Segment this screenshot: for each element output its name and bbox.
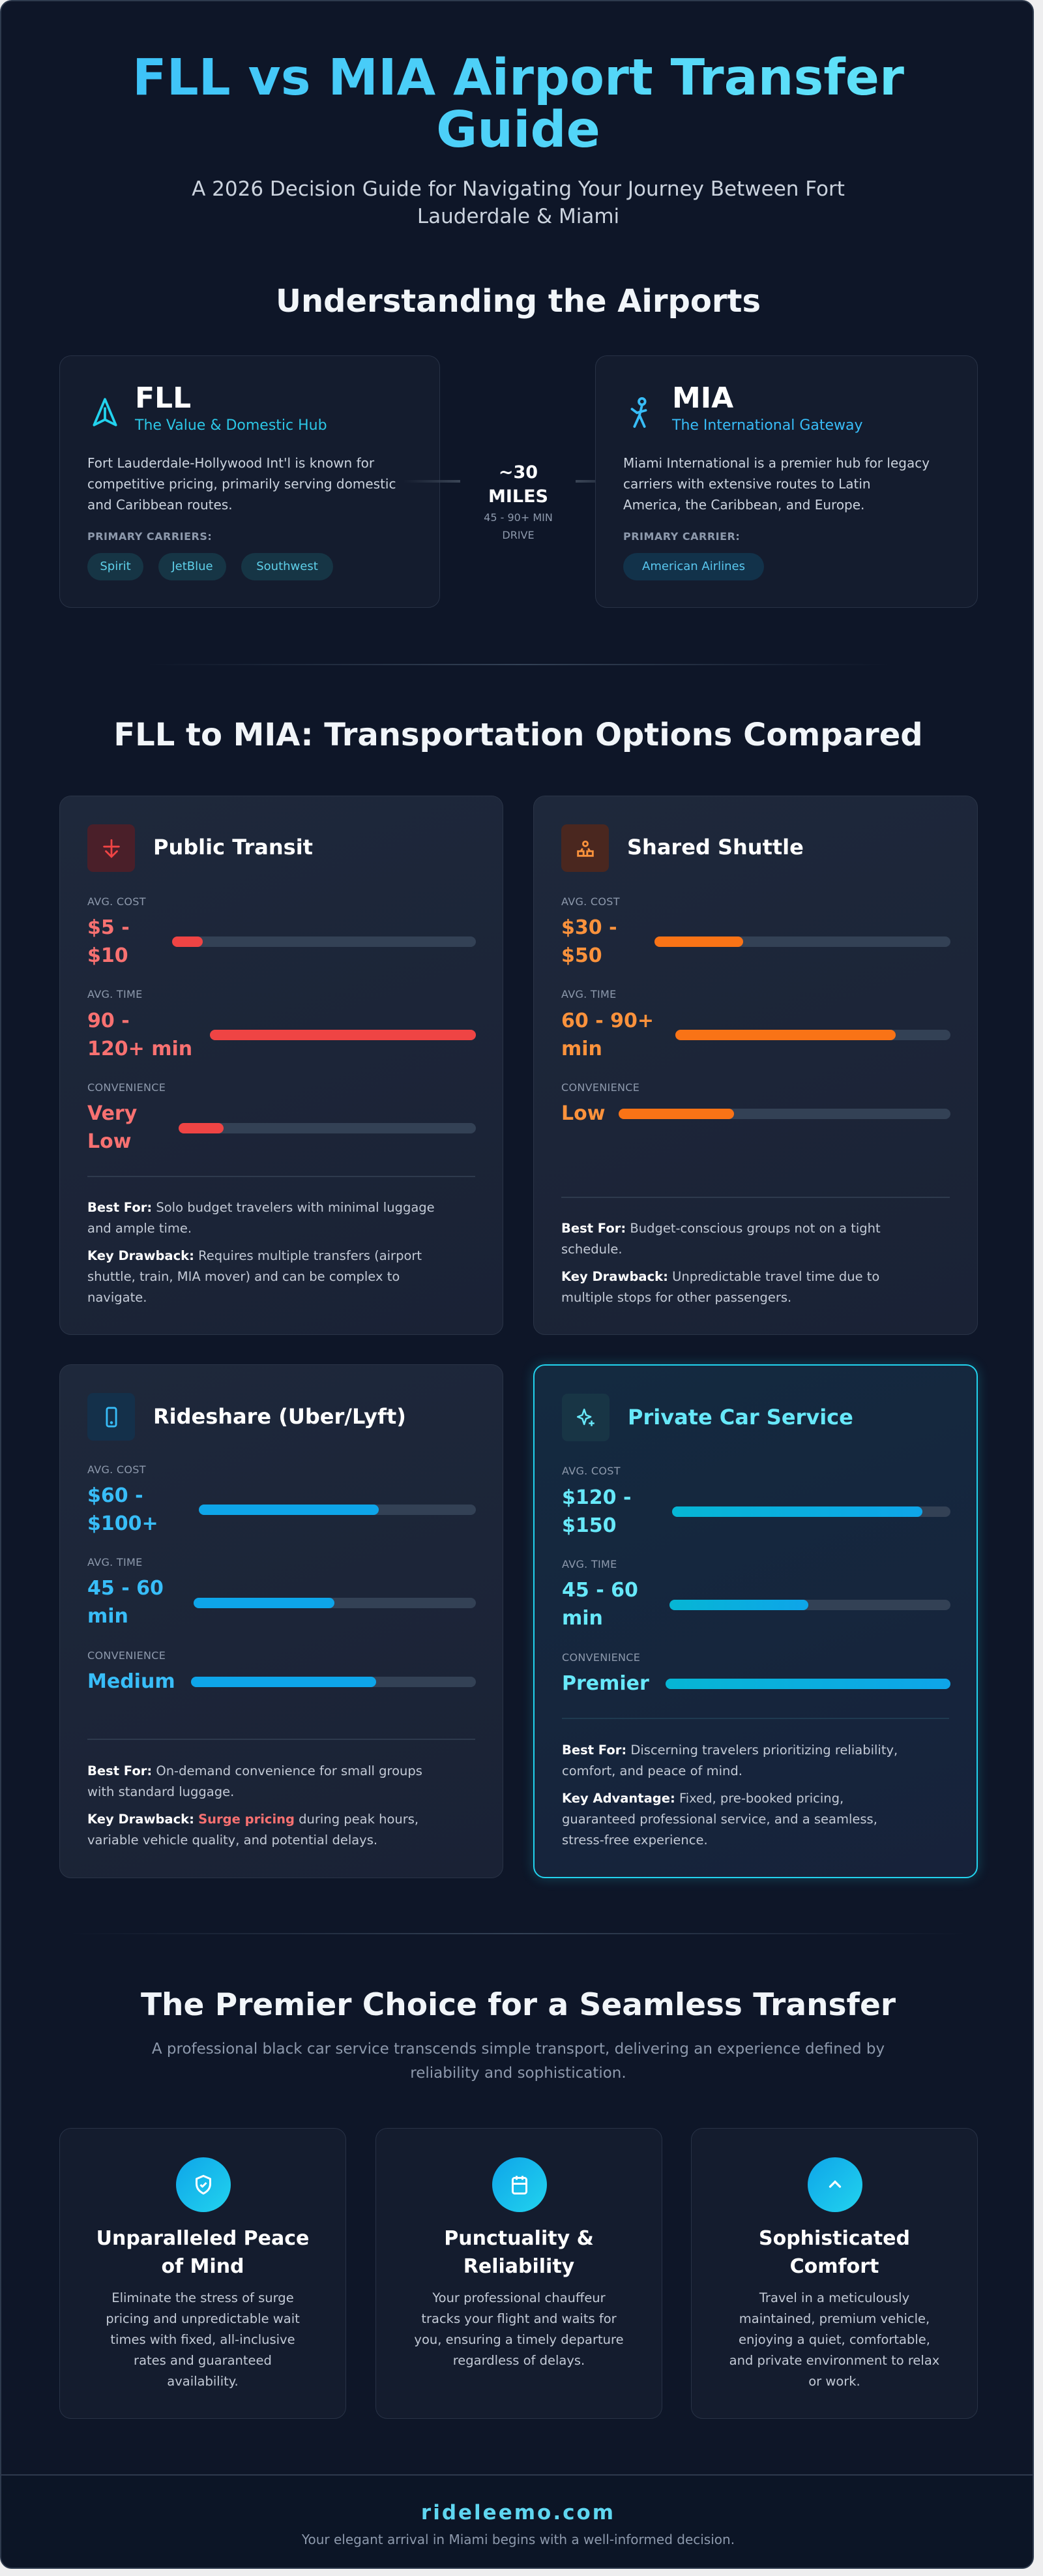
panel: shared shuttle [533,796,978,1335]
feature: comfort: or work. [808,2374,860,2389]
feature: comfort: maintained, premium vehicle, [739,2311,930,2326]
metrics: 120+ min [87,1038,192,1060]
panel: FLL [59,355,440,608]
metrics: min [87,1605,128,1628]
metrics: CONVENIENCE [87,1649,166,1662]
best for / drawback: Best For: On-demand convenience for small groups [87,1763,422,1778]
metrics: CONVENIENCE [87,1081,166,1094]
metrics: Medium [87,1670,175,1693]
feature: comfort: Sophisticated [759,2227,910,2250]
metrics: Premier [562,1672,649,1695]
metrics: 45 - 60 [87,1577,164,1600]
FLL description: Fort Lauderdale-Hollywood Int'l is known for [87,455,374,471]
best for / drawback: schedule. [561,1242,623,1257]
best for / advantage: guaranteed professional service, and a seamless, [562,1812,877,1827]
FLL description [87,455,396,513]
carrier pill [623,553,764,580]
carriers label: PRIMARY CARRIERS: [87,530,212,543]
metrics [561,895,950,1125]
metrics: $50 [561,944,602,967]
best for / drawback: variable vehicle quality, and potential delays. [87,1833,377,1848]
FLL subtitle: The Value & Domestic Hub [135,417,327,434]
footer tagline: Your elegant arrival in Miami begins with a well-informed decision. [302,2532,735,2547]
best for / advantage: Key Advantage: Fixed, pre-booked pricing, [562,1791,844,1806]
metrics: 90 - [87,1010,130,1032]
panel: private car service [533,1364,978,1878]
subtitle [192,177,845,228]
best for / drawback: shuttle, train, MIA mover) and can be complex to [87,1269,400,1284]
carrier pills [87,553,333,580]
feature: comfort: enjoying a quiet, comfortable, [739,2332,930,2347]
metrics: AVG. COST [561,895,620,908]
icon: phone [87,1393,135,1441]
MIA name: MIA [672,382,733,415]
heading: understanding the airports: Understanding the Airports [276,283,761,320]
distance connector: 45 - 90+ MIN [484,511,553,524]
feature: punctuality [375,2128,662,2419]
feature: punctuality: regardless of delays. [453,2353,585,2368]
best for / drawback: Key Drawback: Requires multiple transfers (airport [87,1248,422,1263]
title: Guide [436,101,600,159]
distance connector [415,462,595,541]
metrics: AVG. TIME [562,1558,617,1570]
metrics: AVG. COST [87,895,146,908]
heading: premier choice: The Premier Choice for a Seamless Transfer [141,1987,896,2023]
title: Rideshare (Uber/Lyft) [153,1404,406,1429]
distance connector: ~30 [499,462,538,483]
feature: peace of mind: pricing and unpredictable wait [106,2311,300,2326]
best for / advantage: stress-free experience. [562,1833,708,1848]
best for / drawback: Best For: Budget-conscious groups not on a tight [561,1221,881,1236]
MIA description: carriers with extensive routes to Latin [623,476,871,492]
metrics: CONVENIENCE [562,1651,640,1664]
icon: sparkle [562,1394,610,1441]
metrics: $5 - [87,916,130,939]
metrics: $10 [87,944,128,967]
icon: shield [176,2157,231,2212]
feature: peace of mind: Unparalleled Peace [96,2227,309,2250]
metrics: $150 [562,1514,617,1537]
title: Shared Shuttle [627,835,804,860]
feature: peace of mind [59,2128,346,2419]
subtitle: A 2026 Decision Guide for Navigating Your Journey Between Fort [192,177,845,201]
icon: shuttle [561,824,609,872]
metrics: $100+ [87,1512,158,1535]
best for / advantage [562,1743,898,1848]
metrics [87,1463,476,1693]
distance connector: DRIVE [502,529,535,541]
icon: navigation [93,398,117,427]
panel: public transit [59,796,503,1335]
best for / advantage: comfort, and peace of mind. [562,1763,742,1778]
MIA subtitle: The International Gateway [672,417,863,434]
title: Private Car Service [628,1405,853,1430]
best for / drawback: with standard luggage. [87,1784,234,1799]
metrics: AVG. TIME [87,1556,143,1568]
metrics: AVG. COST [562,1465,621,1477]
metrics [562,1465,950,1695]
feature: punctuality: Punctuality & [444,2227,594,2250]
footer url: rideleemo.com [421,2501,615,2524]
best for / drawback: multiple stops for other passengers. [561,1290,791,1305]
feature: peace of mind: times with fixed, all-inclusive [110,2332,295,2347]
metrics: $60 - [87,1484,143,1507]
feature: peace of mind: rates and guaranteed [134,2353,272,2368]
metrics: Low [561,1102,605,1125]
metrics: min [562,1607,603,1630]
metrics: Very [87,1102,137,1125]
metrics: $120 - [562,1486,631,1509]
best for / drawback: Best For: Solo budget travelers with minimal luggage [87,1200,435,1215]
feature: punctuality: you, ensuring a timely departure [414,2332,624,2347]
metrics: AVG. TIME [87,988,143,1000]
metrics: AVG. TIME [561,988,617,1000]
section subtitle: reliability and sophistication. [410,2065,626,2082]
carrier pill: American Airlines [642,560,745,573]
title: Public Transit [153,835,313,860]
best for / drawback [561,1221,881,1305]
carrier label: PRIMARY CARRIER: [623,530,740,543]
icon: chevron [808,2157,862,2212]
carrier pills: Spirit [100,560,131,573]
feature: comfort: Comfort [790,2255,879,2278]
metrics: CONVENIENCE [561,1081,639,1094]
subtitle: Lauderdale & Miami [417,205,619,228]
feature: comfort [691,2128,978,2419]
best for / advantage: Best For: Discerning travelers prioritizing reliability, [562,1743,898,1758]
best for / drawback: navigate. [87,1290,147,1305]
metrics: min [561,1038,602,1060]
metrics: Low [87,1130,131,1153]
best for / drawback [87,1763,422,1848]
section subtitle: A professional black car service transcends simple transport, delivering an experience defined by [152,2041,885,2058]
feature: punctuality: Reliability [463,2255,574,2278]
carrier pills: JetBlue [171,560,213,573]
icon: transit [87,824,135,872]
FLL name: FLL [135,382,191,415]
MIA description: America, the Caribbean, and Europe. [623,497,864,513]
heading: transportation options: FLL to MIA: Transportation Options Compared [113,717,923,753]
footer [1,2474,1035,2572]
metrics: 45 - 60 [562,1579,638,1602]
metrics: AVG. COST [87,1463,146,1476]
feature: peace of mind: Eliminate the stress of surge [111,2290,294,2305]
feature: punctuality: Your professional chauffeur [432,2290,606,2305]
MIA description: Miami International is a premier hub for legacy [623,455,930,471]
title: FLL vs MIA Airport Transfer [132,49,904,107]
icon: traveler [631,397,647,428]
FLL description: competitive pricing, primarily serving domestic [87,476,396,492]
panel: MIA [595,355,978,608]
carrier pills: Southwest [256,560,318,573]
panel: rideshare [59,1364,503,1878]
feature: peace of mind: availability. [167,2374,239,2389]
distance connector: MILES [488,487,548,507]
feature: peace of mind: of Mind [161,2255,244,2278]
best for / drawback: Key Drawback: Unpredictable travel time due to [561,1269,879,1284]
metrics: $30 - [561,916,617,939]
best for / drawback: Key Drawback: Surge pricing during peak hours, [87,1812,419,1827]
FLL description: and Caribbean routes. [87,497,233,513]
feature: comfort: and private environment to relax [729,2353,939,2368]
best for / drawback [87,1200,435,1305]
feature: comfort: Travel in a meticulously [759,2290,909,2305]
icon: calendar [492,2157,547,2212]
metrics: 60 - 90+ [561,1010,654,1032]
title [1,52,1035,157]
metrics [87,895,476,1153]
feature: punctuality: tracks your flight and waits for [421,2311,617,2326]
MIA description [623,455,930,513]
best for / drawback: and ample time. [87,1221,192,1236]
section subtitle [152,2041,885,2082]
